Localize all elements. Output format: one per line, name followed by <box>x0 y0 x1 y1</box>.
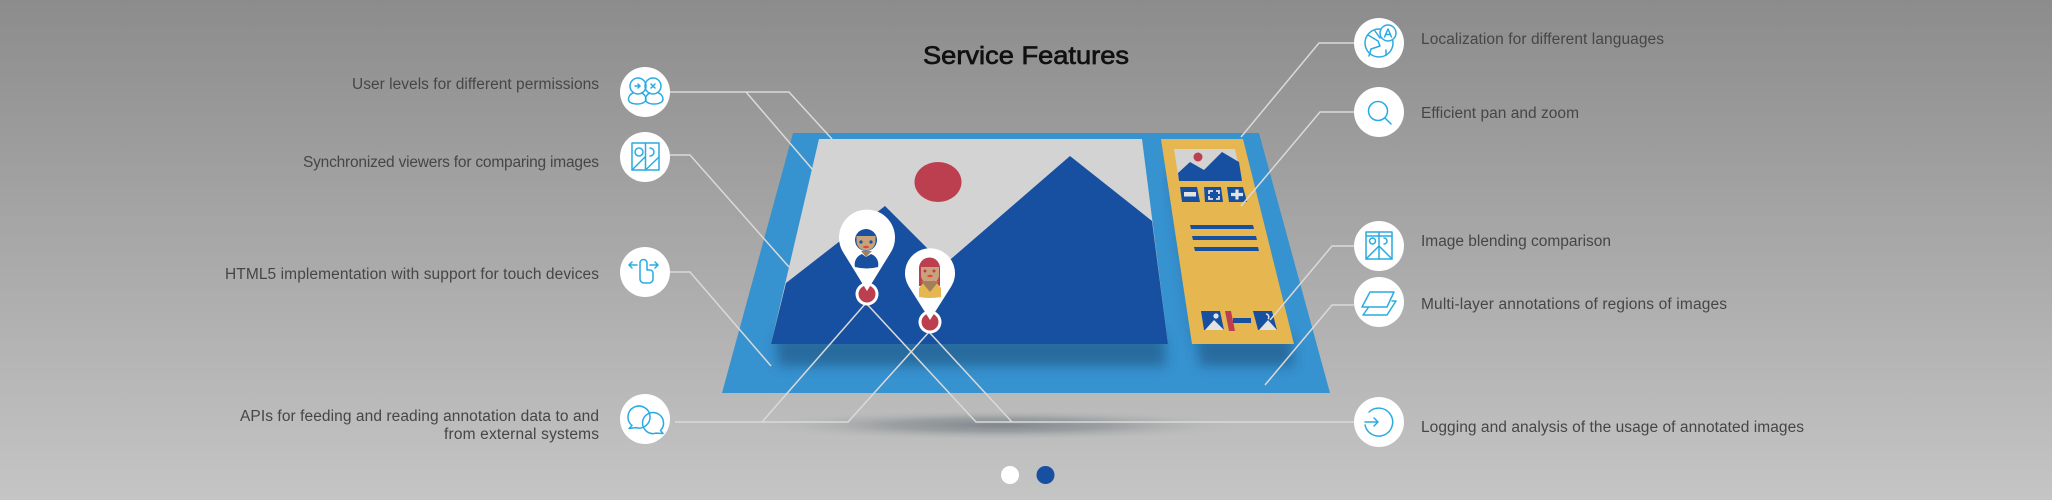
text lines <box>1190 225 1259 251</box>
feature: layers <box>1354 277 1727 327</box>
feature: layers: Multi-layer annotations of regions of images <box>1421 296 1727 313</box>
pager dots <box>1001 466 1054 484</box>
feature: blending: Image blending comparison <box>1421 233 1611 250</box>
feature: localization: Localization for different languages <box>1421 31 1664 48</box>
icon: layers <box>1354 277 1404 327</box>
feature: blending <box>1354 221 1611 271</box>
feature: logging <box>1354 397 1804 447</box>
feature: localization <box>1354 18 1664 68</box>
icon: side by side images <box>620 132 670 182</box>
feature: synchronized viewers <box>303 132 670 182</box>
location pin: male user <box>839 210 895 306</box>
zoom buttons <box>1180 187 1247 202</box>
connector lines <box>670 43 1354 422</box>
feature: synchronized viewers: Synchronized viewers for comparing images <box>303 154 599 171</box>
feature: pan and zoom: Efficient pan and zoom <box>1421 105 1579 122</box>
icon: chat bubbles <box>620 394 670 444</box>
icon: globe <box>1354 18 1404 68</box>
main image <box>771 139 1168 344</box>
feature: APIs <box>240 394 670 444</box>
feature: logging: Logging and analysis of the usage of annotated images <box>1421 419 1804 436</box>
feature: user levels <box>352 67 670 117</box>
feature: touch: HTML5 implementation with support for touch devices <box>225 266 599 283</box>
feature: user levels: User levels for different permissions <box>352 76 599 93</box>
ground shadow <box>760 410 1240 440</box>
feature: APIs: from external systems <box>444 426 599 443</box>
location pin: female user <box>905 248 955 334</box>
feature: APIs: APIs for feeding and reading annotation data to and <box>240 408 599 425</box>
icon: logging arrow <box>1354 397 1404 447</box>
blending slider <box>1201 311 1277 331</box>
title: Service Features <box>923 42 1129 70</box>
icon: users <box>620 67 670 117</box>
feature: pan and zoom <box>1354 87 1579 137</box>
icon: magnifier <box>1354 87 1404 137</box>
icon: blending <box>1354 221 1404 271</box>
icon: touch gesture <box>620 247 670 297</box>
side panel <box>1161 139 1294 344</box>
platform illustration <box>722 133 1330 393</box>
feature: touch <box>225 247 670 297</box>
